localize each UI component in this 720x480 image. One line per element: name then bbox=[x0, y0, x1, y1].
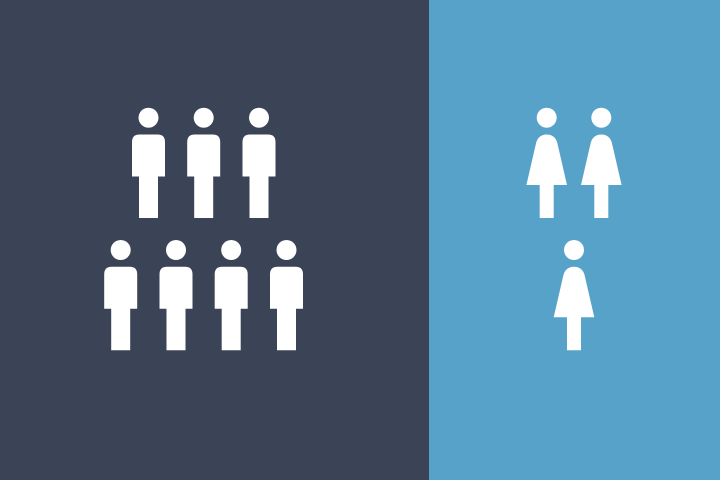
icon: woman 1 bbox=[526, 108, 567, 218]
icon: man 2 bbox=[187, 108, 220, 218]
group: three women bbox=[526, 108, 622, 350]
icon: man 1 bbox=[132, 108, 165, 218]
icon: man 3 bbox=[242, 108, 276, 218]
group: seven men bbox=[104, 108, 303, 350]
icon: man 5 bbox=[160, 240, 192, 350]
icon: man 7 bbox=[270, 240, 303, 350]
icon: woman 2 bbox=[581, 108, 622, 218]
icon: man 6 bbox=[215, 240, 248, 350]
panel: women background bbox=[429, 0, 720, 480]
panel: men background bbox=[0, 0, 429, 480]
icon: man 4 bbox=[104, 240, 137, 350]
icon: woman 3 bbox=[554, 240, 594, 350]
